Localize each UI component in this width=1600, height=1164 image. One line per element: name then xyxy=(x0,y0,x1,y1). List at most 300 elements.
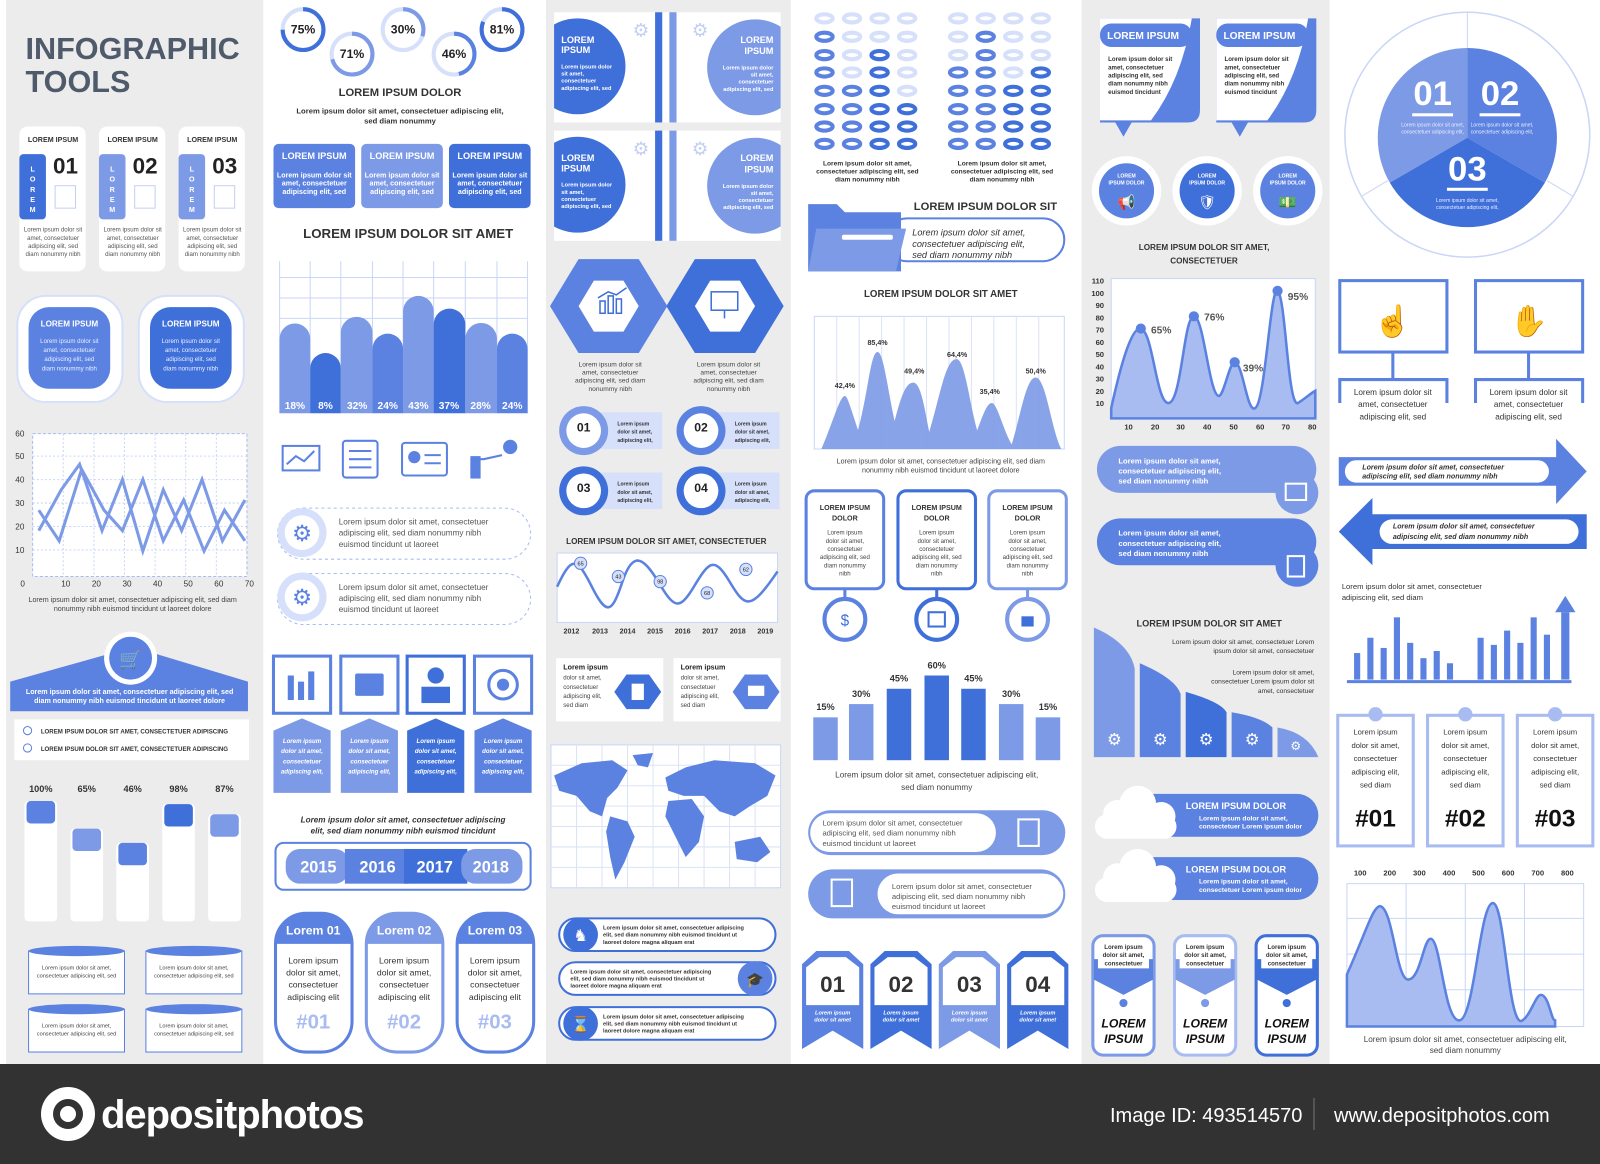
hexagons: nonummy nibh xyxy=(707,386,751,393)
hexagons: amet, consectetuer xyxy=(582,369,639,376)
three tall cards: Lorem ipsum xyxy=(379,955,429,965)
gear pills: adipiscing elit, sed diam nonummy nibh xyxy=(339,594,481,603)
panel: three numbered cards: O xyxy=(189,176,195,184)
two blue pills with icons: sed diam nonummy nibh xyxy=(1118,477,1209,486)
three icon pills col3: laoreet dolore magna aliquam erat xyxy=(570,984,662,990)
panel: three numbered cards: 03 xyxy=(212,153,237,178)
three hashtag cards: adipiscing elit, xyxy=(1531,767,1579,776)
timeline xyxy=(276,815,531,890)
mountain chart: 85,4% xyxy=(867,339,888,347)
panel: three numbered cards: R xyxy=(30,186,35,194)
three cards with icon circles: $ xyxy=(841,613,850,630)
col5: speech cards: diam nonummy nibh xyxy=(1224,81,1284,88)
cloud pills: LOREM IPSUM DOLOR xyxy=(1186,801,1286,811)
folder callout: sed diam nonummy nibh xyxy=(912,250,1012,260)
monitors with hand icons: ✋ xyxy=(1509,304,1548,339)
four icon squares with arrows: dolor sit amet, xyxy=(281,748,323,755)
mountain chart: 35,4% xyxy=(980,388,1001,396)
peak line chart col5: 95% xyxy=(1288,292,1308,303)
bar chart col4 xyxy=(813,660,1060,792)
numbered circles: 01 xyxy=(577,421,591,435)
three tag cards col5: Lorem ipsum xyxy=(1104,944,1143,951)
panel: two rounded squares: LOREM IPSUM xyxy=(41,320,98,329)
panel: three numbered cards: Lorem ipsum dolor sit xyxy=(103,227,162,234)
three tall cards: consectetuer xyxy=(470,980,520,990)
wave chart col3: 68 xyxy=(704,591,710,597)
three cards with icon circles: DOLOR xyxy=(1015,514,1040,522)
numbered circles xyxy=(559,406,780,515)
peak line chart col5: 70 xyxy=(1096,326,1104,335)
area chart col6: Lorem ipsum dolor sit amet, consectetuer adipiscing elit, xyxy=(1364,1035,1567,1044)
three round icons: 🛡 xyxy=(1198,194,1216,211)
three blue boxes: Lorem ipsum dolor sit xyxy=(365,172,440,180)
wave chart col3: 2018 xyxy=(730,628,746,636)
col5: speech cards: amet, consectetuer xyxy=(1108,64,1164,71)
list box xyxy=(14,719,249,760)
mountain chart: LOREM IPSUM DOLOR SIT AMET xyxy=(864,289,1018,300)
peak line chart col5: 10 xyxy=(1096,399,1104,408)
two hex items: sed diam xyxy=(681,702,705,709)
col6: big pie circle: 02 xyxy=(1481,75,1519,113)
mountain chart: 64,4% xyxy=(947,351,968,359)
three tag cards col5: IPSUM xyxy=(1104,1032,1144,1046)
four icon squares with arrows: dolor sit amet, xyxy=(349,748,391,755)
two notebook pills: adipiscing elit, sed diam nonummy nibh xyxy=(892,892,1025,901)
bar chart col2: 24% xyxy=(378,401,398,412)
four icon squares with arrows: dolor sit amet, xyxy=(415,748,457,755)
three cards with icon circles: nibh xyxy=(839,571,851,578)
two notebook pills: adipiscing elit, sed diam nonummy nibh xyxy=(822,829,956,838)
panel: three numbered cards: O xyxy=(30,176,36,184)
three cards with icon circles: diam nonummy xyxy=(916,562,959,569)
three cards with icon circles: dolor sit amet, xyxy=(826,538,864,545)
three hashtag cards: Lorem ipsum xyxy=(1353,728,1398,737)
panel: two rounded squares: LOREM IPSUM xyxy=(162,320,220,329)
hexagons xyxy=(550,259,784,393)
three icon pills col3: elit, sed diam nonummy nibh euismod tincidunt ut xyxy=(570,977,705,983)
folder callout xyxy=(808,201,1064,271)
hexagons: nonummy nibh xyxy=(588,386,632,393)
numbered circles: 03 xyxy=(577,481,591,495)
panel: three numbered cards: E xyxy=(189,196,194,204)
three icon pills col3 xyxy=(559,917,776,1041)
bar chart col2 xyxy=(280,261,528,413)
two blue pills with icons xyxy=(1097,446,1318,587)
three cards with icon circles: Lorem ipsum xyxy=(1010,530,1045,537)
three tag cards col5: IPSUM xyxy=(1186,1032,1225,1046)
staircase chart: ⚙ xyxy=(1107,731,1122,749)
peak line chart col5: 80 xyxy=(1308,423,1316,432)
panel: two rounded squares: amet, consectetuer xyxy=(43,347,95,354)
three round icons: 📢 xyxy=(1118,194,1135,211)
wave chart col3: 2016 xyxy=(675,628,691,636)
three icon pills col3: ♞ xyxy=(573,927,588,945)
col3: half circle panels: consectetuer xyxy=(739,198,774,204)
four icon squares with arrows: adipiscing elit, xyxy=(281,768,324,775)
three hashtag cards: dolor sit amet, xyxy=(1441,741,1489,750)
three tall cards: #01 xyxy=(296,1012,330,1034)
four banners: 02 xyxy=(889,972,913,997)
cloud pills: LOREM IPSUM DOLOR xyxy=(1186,864,1286,874)
house banner with cart icon: 🛒 xyxy=(119,648,142,670)
gear pills: Lorem ipsum dolor sit amet, consectetuer xyxy=(339,517,489,526)
heading lorem ipsum dolor xyxy=(296,87,504,125)
four icon squares with arrows: adipiscing elit, xyxy=(414,768,457,775)
col6: big pie circle: 01 xyxy=(1413,75,1452,113)
col3: half circle panels xyxy=(554,12,781,241)
numbered circles: adipiscing elit, xyxy=(617,498,653,504)
peak line chart col5: 40 xyxy=(1203,423,1211,432)
three tag cards col5: dolor sit amet, xyxy=(1103,952,1145,959)
wave chart col3: 2019 xyxy=(757,628,773,636)
three tall cards: #02 xyxy=(387,1012,421,1034)
three cards with icon circles xyxy=(806,491,1066,640)
three round icons: LOREM xyxy=(1279,174,1297,180)
three tall cards: dolor sit amet, xyxy=(468,968,522,978)
three icon pills col3: laoreet dolore magna aliquam erat xyxy=(603,940,695,946)
area chart col6: 300 xyxy=(1413,869,1426,878)
three cards with icon circles: DOLOR xyxy=(832,514,858,522)
hexagons: adipiscing elit, sed diam xyxy=(693,378,764,385)
col5: speech cards: euismod tincidunt xyxy=(1108,89,1161,96)
three tag cards col5: consectetuer xyxy=(1186,960,1225,967)
heading lorem ipsum dolor: LOREM IPSUM DOLOR xyxy=(339,87,461,99)
two blue pills with icons: consectetuer adipiscing elit, xyxy=(1118,466,1221,475)
col3: half circle panels: sit amet, xyxy=(751,191,774,197)
col4: ring grids: consectetuer adipiscing elit, sed xyxy=(816,168,919,175)
two notebook pills: euismod tincidunt ut laoreet xyxy=(892,902,986,911)
two blue pills with icons: sed diam nonummy nibh xyxy=(1118,549,1209,558)
four icon squares with arrows xyxy=(273,656,532,793)
three blue boxes: adipiscing elit, sed xyxy=(458,188,522,196)
three tall cards: Lorem 02 xyxy=(377,924,431,938)
gear pills: ⚙ xyxy=(292,585,312,610)
area chart col6: 800 xyxy=(1561,869,1574,878)
col4: ring grids xyxy=(816,14,1053,184)
three blue boxes: amet, consectetuer xyxy=(282,180,347,188)
four icon squares with arrows: Lorem ipsum xyxy=(484,738,523,745)
col3: half circle panels: adipiscing elit, sed xyxy=(723,205,774,211)
col4: ring grids: diam nonummy nibh xyxy=(835,177,900,184)
area chart col6: 200 xyxy=(1383,869,1396,878)
numbered circles: dolor sit amet, xyxy=(735,430,770,436)
house banner with cart icon xyxy=(10,632,248,711)
three hashtag cards: consectetuer xyxy=(1533,754,1577,763)
three cards with icon circles: DOLOR xyxy=(924,514,950,522)
col3: half circle panels: sit amet, xyxy=(561,190,584,196)
three cards with icon circles: consectetuer xyxy=(919,546,954,553)
peak line chart col5: 40 xyxy=(1096,362,1104,371)
three tag cards col5: Lorem ipsum xyxy=(1186,944,1225,951)
hexagons: adipiscing elit, sed diam xyxy=(575,378,646,385)
line chart col1: 40 xyxy=(15,476,25,485)
bottles chart xyxy=(24,784,241,921)
three icon pills col3: elit, sed diam nonummy nibh euismod tincidunt ut xyxy=(603,1022,737,1028)
bar chart col4: 30% xyxy=(1002,689,1020,699)
four icon squares with arrows: dolor sit amet, xyxy=(482,748,524,755)
line chart col1: 10 xyxy=(61,580,71,589)
three cards with icon circles: adipiscing elit, sed xyxy=(1003,554,1053,561)
percent rings: 30% xyxy=(391,23,415,37)
col5: speech cards: LOREM IPSUM xyxy=(1223,31,1295,42)
numbered circles: Lorem ipsum xyxy=(735,482,767,488)
three cards with icon circles: diam nonummy xyxy=(1007,562,1049,569)
three cards with icon circles: diam nonummy xyxy=(824,562,867,569)
panel: three numbered cards: L xyxy=(190,165,195,173)
two hex items: dolor sit amet, xyxy=(681,675,719,682)
wave chart col3: 2012 xyxy=(563,628,579,636)
numbered circles: dolor sit amet, xyxy=(617,430,653,436)
four banners: 04 xyxy=(1025,972,1051,997)
three round icons: IPSUM DOLOR xyxy=(1189,181,1225,187)
four banners: 01 xyxy=(820,972,845,997)
three hashtag cards: #02 xyxy=(1445,806,1486,833)
three tag cards col5: LOREM xyxy=(1101,1017,1146,1031)
panel: three numbered cards: diam nonummy nibh xyxy=(105,251,160,258)
peak line chart col5: 90 xyxy=(1096,301,1104,310)
area chart col6: sed diam nonummy xyxy=(1430,1046,1502,1055)
four banners xyxy=(802,951,1068,1049)
two hex items: consectetuer xyxy=(681,684,716,691)
col3: half circle panels: Lorem ipsum dolor xyxy=(723,65,774,71)
three tall cards: consectetuer xyxy=(379,980,429,990)
staircase chart xyxy=(1094,619,1318,757)
footer bar xyxy=(0,1064,1600,1164)
three tall cards: dolor sit amet, xyxy=(286,968,340,978)
col3: half circle panels: ⚙ xyxy=(633,20,649,41)
four banners: Lorem ipsum xyxy=(1020,1010,1055,1016)
two hex items: Lorem ipsum xyxy=(681,663,725,671)
three round icons: 💵 xyxy=(1279,195,1297,211)
peak line chart col5: 60 xyxy=(1096,338,1104,347)
three blue boxes: adipiscing elit, sed xyxy=(370,188,434,196)
col3: half circle panels: LOREM xyxy=(561,35,595,45)
numbered circles: dolor sit amet, xyxy=(617,490,653,496)
numbered circles: adipiscing elit, xyxy=(735,438,771,444)
peak line chart col5: 39% xyxy=(1243,363,1263,374)
three tag cards col5: dolor sit amet, xyxy=(1266,952,1308,959)
col4: ring grids: Lorem ipsum dolor sit amet, xyxy=(958,160,1047,167)
col4: ring grids: consectetuer adipiscing elit, sed xyxy=(951,168,1053,175)
panel: three numbered cards: adipiscing elit, sed xyxy=(28,243,78,250)
bar chart col4: 60% xyxy=(928,660,946,670)
staircase chart: ipsum dolor sit amet, consectetuer xyxy=(1213,648,1315,655)
three hashtag cards: dolor sit amet, xyxy=(1531,741,1579,750)
col6: big pie circle: Lorem ipsum dolor sit amet, xyxy=(1471,123,1533,129)
three blue boxes: amet, consectetuer xyxy=(370,180,435,188)
cylinders: Lorem ipsum dolor sit amet, xyxy=(159,1024,229,1030)
wave chart col3: 43 xyxy=(615,575,621,581)
numbered circles: 02 xyxy=(694,421,708,435)
three tag cards col5: IPSUM xyxy=(1267,1032,1307,1046)
wave chart col3: 2015 xyxy=(647,628,663,636)
four banners: Lorem ipsum xyxy=(883,1010,919,1016)
bar chart col4: 45% xyxy=(890,674,908,684)
panel: two rounded squares: Lorem ipsum dolor sit xyxy=(40,338,99,345)
peak line chart col5: 20 xyxy=(1151,423,1159,432)
three round icons: IPSUM DOLOR xyxy=(1270,181,1306,187)
cylinders: Lorem ipsum dolor sit amet, xyxy=(159,965,229,971)
three tall cards: adipiscing elit xyxy=(378,992,431,1002)
peak line chart col5: 65% xyxy=(1151,326,1171,337)
wave chart col3: 98 xyxy=(657,580,663,586)
col5: speech cards: Lorem ipsum dolor sit xyxy=(1224,56,1289,63)
panel: two rounded squares xyxy=(17,296,244,402)
col5: speech cards: diam nonummy nibh xyxy=(1108,81,1168,88)
col6: big pie circle: Lorem ipsum dolor sit amet, xyxy=(1401,123,1464,129)
panel: three numbered cards: Lorem ipsum dolor sit xyxy=(24,227,83,234)
bar chart col2: 18% xyxy=(285,401,305,412)
area chart col6: 100 xyxy=(1354,869,1367,878)
three hashtag cards: dolor sit amet, xyxy=(1351,741,1399,750)
three blue boxes: LOREM IPSUM xyxy=(282,151,347,161)
wave chart col3: 2014 xyxy=(620,628,636,636)
peak line chart col5: 30 xyxy=(1096,375,1104,384)
three icon pills col3: ⌛ xyxy=(571,1016,590,1034)
three cards with icon circles: LOREM IPSUM xyxy=(912,504,962,512)
two blue pills with icons: consectetuer adipiscing elit, xyxy=(1118,539,1221,548)
cylinders: consectetuer adipiscing elit, sed xyxy=(37,1032,116,1038)
col3: half circle panels: Lorem ipsum dolor xyxy=(723,184,774,190)
three cards with icon circles: nibh xyxy=(1022,571,1033,578)
col6: big pie circle xyxy=(1345,12,1590,257)
col3: half circle panels: IPSUM xyxy=(561,45,591,55)
numbered circles: Lorem ipsum xyxy=(617,482,650,488)
panel: three numbered cards: E xyxy=(110,196,115,204)
panel: three numbered cards: LOREM IPSUM xyxy=(108,136,158,144)
panel: three numbered cards: diam nonummy nibh xyxy=(185,251,240,258)
panel: three numbered cards xyxy=(19,127,245,271)
mountain chart: Lorem ipsum dolor sit amet, consectetuer adipiscing elit, sed diam xyxy=(837,457,1045,465)
numbered circles: adipiscing elit, xyxy=(617,438,653,444)
numbered circles: dolor sit amet, xyxy=(735,490,770,496)
col5: speech cards: LOREM IPSUM xyxy=(1107,31,1179,42)
wave chart col3: 2013 xyxy=(592,628,608,636)
timeline: elit, sed diam nonummy nibh euismod tincidunt xyxy=(311,827,496,836)
col4: ring grids: Lorem ipsum dolor sit amet, xyxy=(823,160,912,167)
bar chart col4: 15% xyxy=(816,702,835,712)
four icon squares with arrows: Lorem ipsum xyxy=(417,738,455,745)
three tall cards: Lorem ipsum xyxy=(470,955,520,965)
col5: speech cards: Lorem ipsum dolor sit xyxy=(1108,56,1172,63)
bar chart col4: sed diam nonummy xyxy=(901,783,973,792)
gear pills: euismod tincidunt ut laoreet xyxy=(339,605,439,614)
staircase chart: consectetuer Lorem ipsum dolor sit xyxy=(1211,679,1314,686)
arrows: Lorem ipsum dolor sit amet, consectetuer xyxy=(1362,463,1505,471)
peak line chart col5 xyxy=(1091,243,1316,432)
col3: half circle panels: consectetuer xyxy=(739,80,774,86)
line chart col1: 20 xyxy=(92,580,101,589)
panel: three numbered cards: R xyxy=(110,186,115,194)
mountain chart: 42,4% xyxy=(835,382,856,390)
col3: half circle panels: Lorem ipsum dolor xyxy=(561,64,613,70)
three hashtag cards: consectetuer xyxy=(1354,754,1398,763)
col3: half circle panels: consectetuer xyxy=(561,197,597,203)
peak line chart col5: LOREM IPSUM DOLOR SIT AMET, xyxy=(1139,243,1269,252)
panel: two rounded squares: Lorem ipsum dolor sit xyxy=(162,338,220,345)
bottles chart: 87% xyxy=(215,784,234,794)
monitors with hand icons xyxy=(1340,281,1583,421)
three round icons: IPSUM DOLOR xyxy=(1109,181,1145,187)
area chart col6: 700 xyxy=(1531,869,1544,878)
three cards with icon circles: LOREM IPSUM xyxy=(1002,504,1053,512)
staircase chart: LOREM IPSUM DOLOR SIT AMET xyxy=(1136,619,1282,629)
three cards with icon circles: LOREM IPSUM xyxy=(820,504,870,512)
numbered circles: adipiscing elit, xyxy=(735,498,771,504)
three tag cards col5: dolor sit amet, xyxy=(1184,952,1226,959)
panel: two rounded squares: amet, consectetuer xyxy=(165,347,217,354)
col6: big pie circle: Lorem ipsum dolor sit amet, xyxy=(1436,198,1499,204)
area chart col6: 600 xyxy=(1502,869,1515,878)
three hashtag cards: adipiscing elit, xyxy=(1441,767,1489,776)
col3: half circle panels: adipiscing elit, sed xyxy=(561,86,612,92)
three cards with icon circles: nibh xyxy=(931,571,943,578)
wave chart col3 xyxy=(557,537,778,636)
panel: two rounded squares: diam nonummy nibh xyxy=(42,365,97,372)
panel: three numbered cards: O xyxy=(109,176,115,184)
area chart col6 xyxy=(1347,869,1584,1055)
line chart col1: Lorem ipsum dolor sit amet, consectetuer adipiscing elit, sed diam xyxy=(28,596,237,604)
three hashtag cards: Lorem ipsum xyxy=(1443,728,1487,737)
four icon squares with arrows: adipiscing elit, xyxy=(482,768,525,775)
four icon squares with arrows: consectetuer xyxy=(283,758,322,765)
three hashtag cards: #01 xyxy=(1355,806,1396,833)
gear pills: ⚙ xyxy=(292,521,312,546)
two notebook pills: Lorem ipsum dolor sit amet, consectetuer xyxy=(892,882,1032,891)
bottles chart: 65% xyxy=(78,784,96,794)
three round icons xyxy=(1092,156,1322,226)
three tag cards col5: consectetuer xyxy=(1104,960,1143,967)
three hashtag cards: Lorem ipsum xyxy=(1533,728,1577,737)
line chart col1: 50 xyxy=(184,580,193,589)
col3: half circle panels: LOREM xyxy=(561,153,595,163)
peak line chart col5: 50 xyxy=(1229,423,1238,432)
growth bar chart: Lorem ipsum dolor sit amet, consectetuer xyxy=(1342,582,1482,591)
staircase chart: Lorem ipsum dolor sit amet, xyxy=(1233,669,1314,676)
panel: three numbered cards: amet, consectetuer xyxy=(186,235,238,242)
panel: three numbered cards: amet, consectetuer xyxy=(27,235,79,242)
col5: speech cards: euismod tincidunt xyxy=(1224,89,1277,96)
staircase chart: amet, consectetuer xyxy=(1258,688,1315,695)
four icon squares with arrows: consectetuer xyxy=(484,758,523,765)
mountain chart: 50,4% xyxy=(1026,367,1046,375)
panel: three numbered cards: adipiscing elit, sed xyxy=(187,243,237,250)
gear pills: euismod tincidunt ut laoreet xyxy=(339,540,439,549)
four banners: dolor sit amet xyxy=(951,1017,989,1023)
col5: speech cards: adipiscing elit, sed xyxy=(1224,73,1279,80)
col3: half circle panels: IPSUM xyxy=(744,164,774,174)
three cards with icon circles: dolor sit amet, xyxy=(1008,538,1047,545)
col6: big pie circle: consectetuer adipiscing elit, xyxy=(1471,130,1533,136)
three cards with icon circles: dolor sit amet, xyxy=(918,538,956,545)
line chart col1: 30 xyxy=(15,499,25,508)
panel: three numbered cards: E xyxy=(30,196,35,204)
two blue pills with icons: Lorem ipsum dolor sit amet, xyxy=(1118,456,1221,465)
three tall cards: dolor sit amet, xyxy=(377,968,431,978)
heading lorem ipsum dolor: Lorem ipsum dolor sit amet, consectetuer adipiscing elit, xyxy=(296,106,504,115)
four icon squares with arrows: consectetuer xyxy=(350,758,389,765)
mountain chart xyxy=(814,289,1064,474)
three hashtag cards: adipiscing elit, xyxy=(1351,767,1399,776)
col5: speech cards xyxy=(1100,18,1316,137)
panel: three numbered cards: 01 xyxy=(53,153,78,178)
bar chart col2: 24% xyxy=(502,401,522,412)
three icon pills col3: 🎓 xyxy=(746,973,764,989)
three cards with icon circles: consectetuer xyxy=(1010,546,1045,553)
list box: LOREM IPSUM DOLOR SIT AMET, CONSECTETUER ADIPISCING xyxy=(41,746,228,753)
two hex items: sed diam xyxy=(563,702,588,709)
four banners: Lorem ipsum xyxy=(952,1010,987,1016)
